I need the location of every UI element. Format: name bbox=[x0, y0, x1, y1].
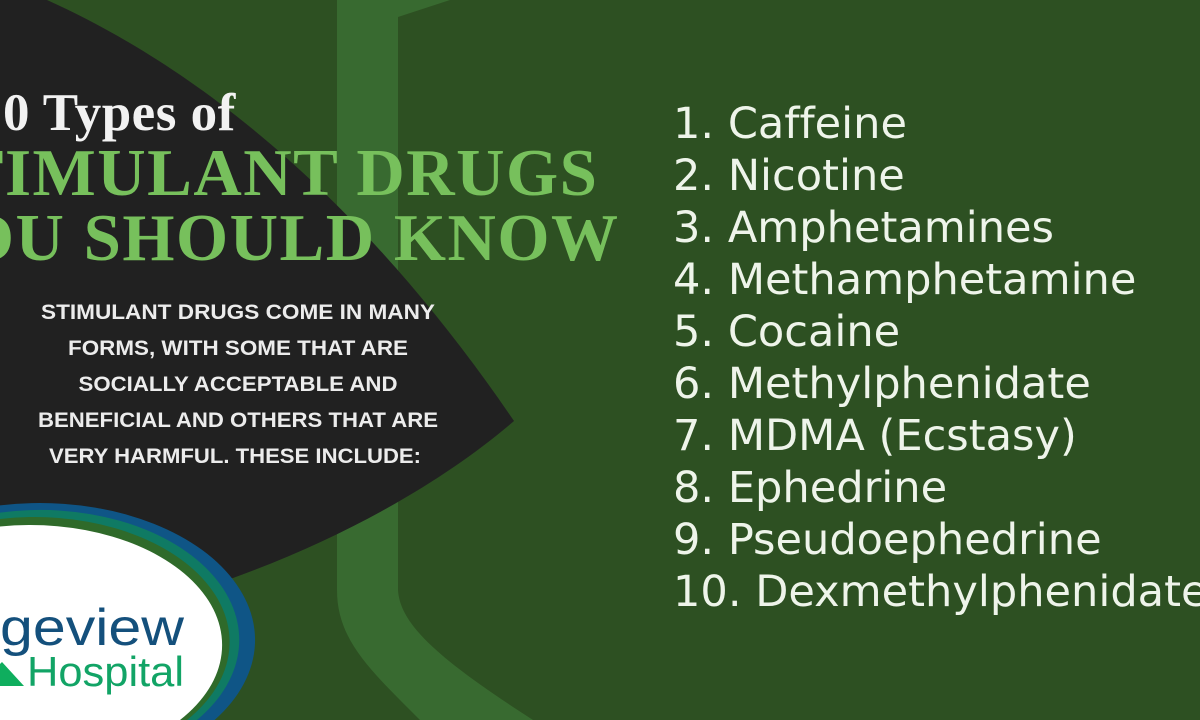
list of drugs: 9. Pseudoephedrine bbox=[673, 515, 1102, 565]
list of drugs: 6. Methylphenidate bbox=[673, 359, 1091, 409]
list of drugs: 10. Dexmethylphenidate bbox=[673, 567, 1200, 617]
intro paragraph: SOCIALLY ACCEPTABLE AND bbox=[78, 373, 398, 396]
list of drugs: 5. Cocaine bbox=[673, 307, 900, 357]
list of drugs: 8. Ephedrine bbox=[673, 463, 947, 513]
intro paragraph bbox=[38, 301, 438, 468]
shield band bbox=[337, 0, 533, 720]
list of drugs: 2. Nicotine bbox=[673, 151, 905, 201]
intro paragraph: STIMULANT DRUGS COME IN MANY bbox=[41, 301, 435, 324]
list of drugs: 4. Methamphetamine bbox=[673, 255, 1136, 305]
logo wordmark top: geview bbox=[0, 599, 184, 657]
list of drugs: 1. Caffeine bbox=[673, 99, 907, 149]
intro paragraph: BENEFICIAL AND OTHERS THAT ARE bbox=[38, 409, 438, 432]
list of drugs: 3. Amphetamines bbox=[673, 203, 1054, 253]
logo wordmark bottom: Hospital bbox=[27, 648, 184, 695]
intro paragraph: VERY HARMFUL. THESE INCLUDE: bbox=[49, 445, 421, 468]
logo badge bbox=[0, 503, 255, 720]
logo triangle bbox=[0, 662, 24, 686]
intro paragraph: FORMS, WITH SOME THAT ARE bbox=[68, 337, 408, 360]
list of drugs bbox=[673, 99, 1200, 617]
list of drugs: 7. MDMA (Ecstasy) bbox=[673, 411, 1077, 461]
dark panel bbox=[0, 0, 514, 600]
